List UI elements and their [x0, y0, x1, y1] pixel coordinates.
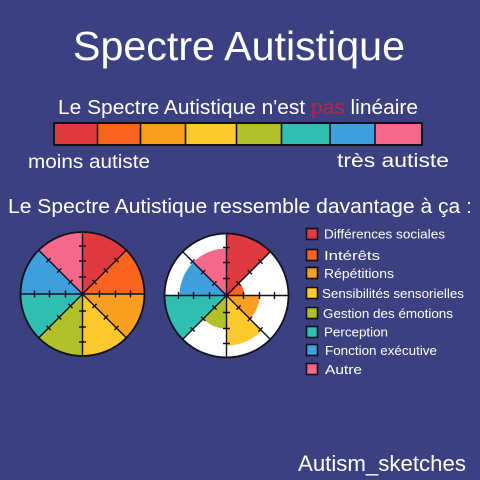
label: very autistic: très autiste — [337, 151, 449, 172]
legend item: interests — [306, 248, 381, 263]
linear spectrum bar — [54, 123, 422, 145]
legend item: social differences: Différences sociales — [324, 226, 446, 242]
title: Spectre Autistique — [73, 23, 405, 69]
legend — [306, 226, 465, 377]
legend item: interests: Intérêts — [324, 248, 381, 263]
legend item: other — [306, 362, 362, 377]
legend item: perception: Perception — [324, 324, 388, 340]
legend item: emotion management: Gestion des émotions — [323, 306, 454, 321]
legend item: repetitions: Répétitions — [324, 266, 395, 281]
wheel: individual profile example — [152, 234, 288, 358]
wheel: full spectrum example — [8, 219, 157, 369]
legend item: executive function: Fonction exécutive — [325, 343, 437, 358]
legend item: sensory sensitivities: Sensibilités sensorielles — [322, 286, 465, 301]
section heading: Le Spectre Autistique ressemble davantage à ça : — [8, 196, 472, 218]
legend item: other: Autre — [325, 362, 362, 377]
label: less autistic: moins autiste — [28, 152, 150, 173]
author signature: Autism_sketches — [298, 451, 466, 476]
subtitle: the spectrum is not linear: Le Spectre Autistique n'est pas linéaire — [58, 97, 418, 119]
